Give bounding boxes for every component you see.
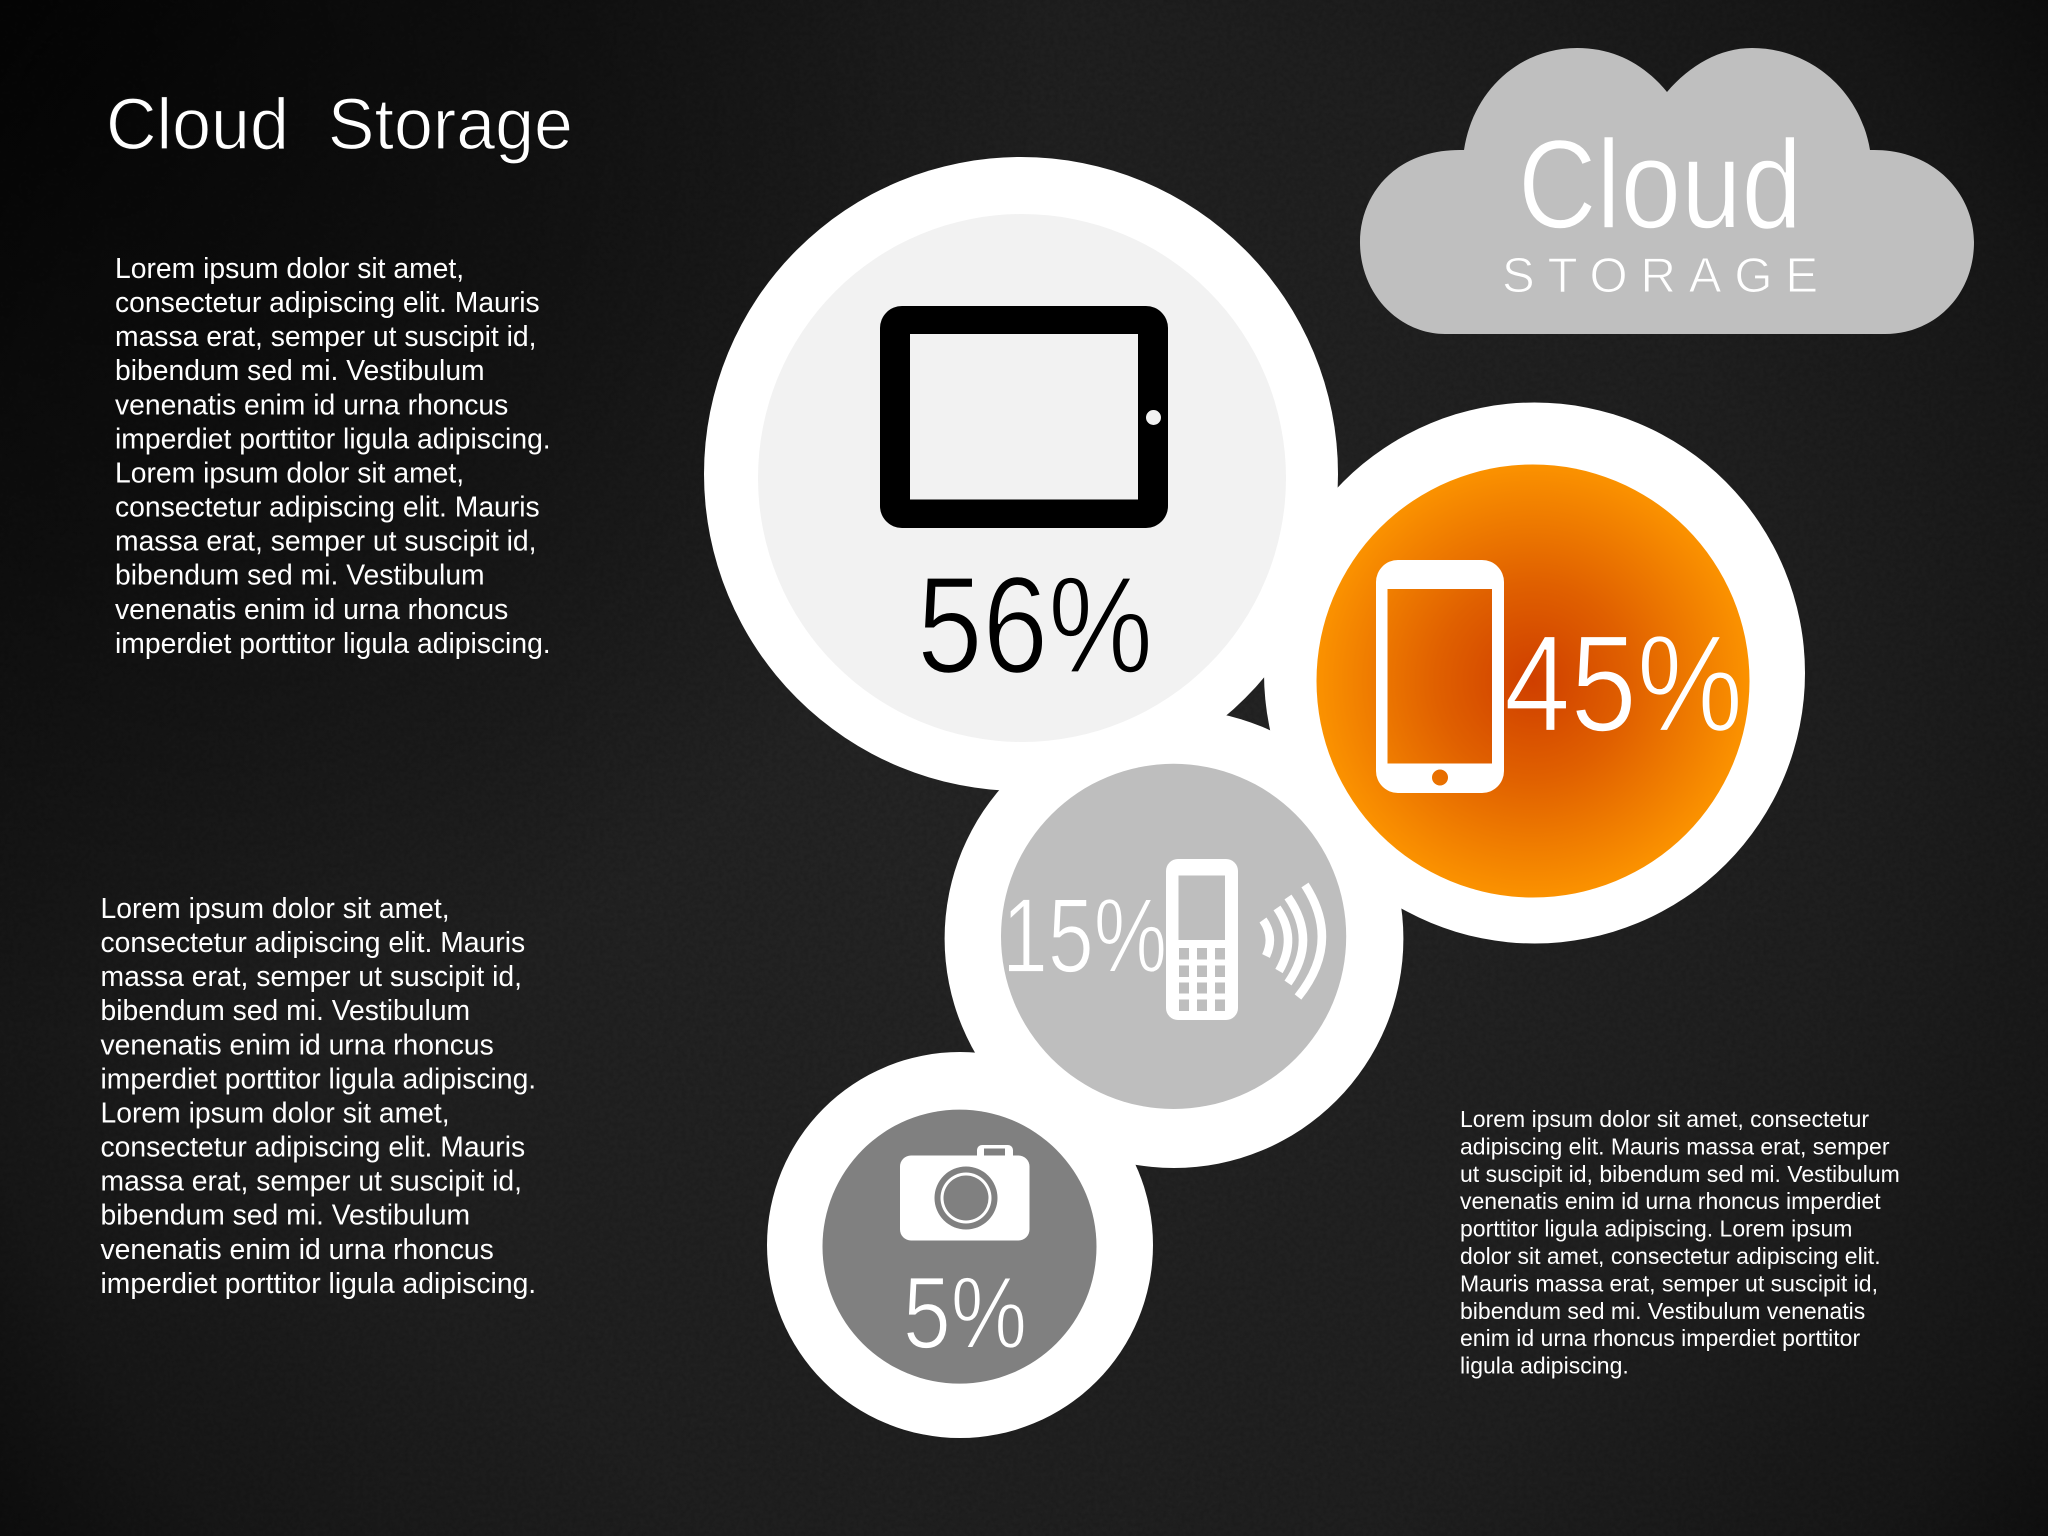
text block: lower right: adipiscing elit. Mauris massa erat, semper <box>1460 1133 1890 1159</box>
text block: upper left: massa erat, semper ut suscipit id, <box>115 320 536 352</box>
text block: upper left: bibendum sed mi. Vestibulum <box>115 354 485 386</box>
text block: lower left <box>100 892 536 1299</box>
text block: lower left: bibendum sed mi. Vestibulum <box>100 994 470 1026</box>
text block: lower right: ut suscipit id, bibendum sed mi. Vestibulum <box>1460 1161 1900 1187</box>
panel: smartphone 45% <box>1316 464 1750 898</box>
panel: camera 5% <box>822 1110 1096 1384</box>
text block: upper left: imperdiet porttitor ligula adipiscing. <box>115 627 551 659</box>
text block: upper left: venenatis enim id urna rhoncus <box>115 388 508 420</box>
icon: signal waves <box>1263 885 1322 997</box>
inner disc <box>1316 464 1750 898</box>
text block: lower left: consectetur adipiscing elit. Mauris <box>100 926 525 958</box>
white outer discs <box>704 157 1805 1438</box>
text block: lower left: imperdiet porttitor ligula adipiscing. <box>100 1267 536 1299</box>
text block: lower left: Lorem ipsum dolor sit amet, <box>100 1096 450 1128</box>
inner disc <box>1001 764 1346 1109</box>
cloud wordmark: Cloud <box>1518 114 1802 255</box>
icon: camera <box>900 1145 1030 1240</box>
text block: lower right: ligula adipiscing. <box>1460 1353 1629 1379</box>
value 56%: 56% <box>917 548 1153 702</box>
text block: upper left: imperdiet porttitor ligula adipiscing. <box>115 422 551 454</box>
text block: upper left: Lorem ipsum dolor sit amet, <box>115 456 464 488</box>
text block: lower right: dolor sit amet, consectetur adipiscing elit. <box>1460 1243 1881 1269</box>
text block: lower right: porttitor ligula adipiscing. Lorem ipsum <box>1460 1216 1852 1242</box>
text block: lower right: bibendum sed mi. Vestibulum venenatis <box>1460 1298 1865 1324</box>
inner disc <box>822 1110 1096 1384</box>
text block: lower right <box>1460 1106 1900 1379</box>
text block: lower right: Mauris massa erat, semper ut suscipit id, <box>1460 1270 1878 1296</box>
text block: upper left <box>115 252 551 659</box>
panel: mobile phone 15% <box>1001 764 1346 1109</box>
text block: lower left: massa erat, semper ut suscipit id, <box>100 960 522 992</box>
icon: smartphone <box>1376 560 1504 793</box>
text block: lower left: massa erat, semper ut suscipit id, <box>100 1164 522 1196</box>
inner disc <box>758 214 1286 742</box>
text block: lower right: venenatis enim id urna rhoncus imperdiet <box>1460 1188 1881 1214</box>
panel: tablet 56% <box>758 214 1286 742</box>
icon: tablet <box>880 306 1168 528</box>
text block: lower left: imperdiet porttitor ligula adipiscing. <box>100 1062 536 1094</box>
value 5%: 5% <box>903 1256 1027 1370</box>
text block: upper left: Lorem ipsum dolor sit amet, <box>115 252 464 284</box>
icon: keypad phone <box>1166 859 1238 1020</box>
text block: lower right: enim id urna rhoncus imperdiet porttitor <box>1460 1325 1860 1351</box>
text block: lower left: Lorem ipsum dolor sit amet, <box>100 892 450 924</box>
text block: lower right: Lorem ipsum dolor sit amet, consectetur <box>1460 1106 1869 1132</box>
text block: upper left: bibendum sed mi. Vestibulum <box>115 558 485 590</box>
text block: upper left: consectetur adipiscing elit. Mauris <box>115 490 540 522</box>
value 45%: 45% <box>1504 607 1743 761</box>
text block: upper left: massa erat, semper ut suscipit id, <box>115 524 536 556</box>
text block: lower left: bibendum sed mi. Vestibulum <box>100 1198 470 1230</box>
text block: upper left: consectetur adipiscing elit. Mauris <box>115 286 540 318</box>
cloud shape <box>1360 48 1974 334</box>
text block: lower left: venenatis enim id urna rhoncus <box>100 1233 494 1265</box>
cloud badge <box>1360 48 1974 334</box>
storage wordmark: STORAGE <box>1502 249 1818 303</box>
value 15%: 15% <box>1002 877 1167 995</box>
title: Cloud Storage <box>106 85 573 165</box>
text block: lower left: consectetur adipiscing elit. Mauris <box>100 1130 525 1162</box>
text block: lower left: venenatis enim id urna rhoncus <box>100 1028 494 1060</box>
text block: upper left: venenatis enim id urna rhoncus <box>115 593 508 625</box>
